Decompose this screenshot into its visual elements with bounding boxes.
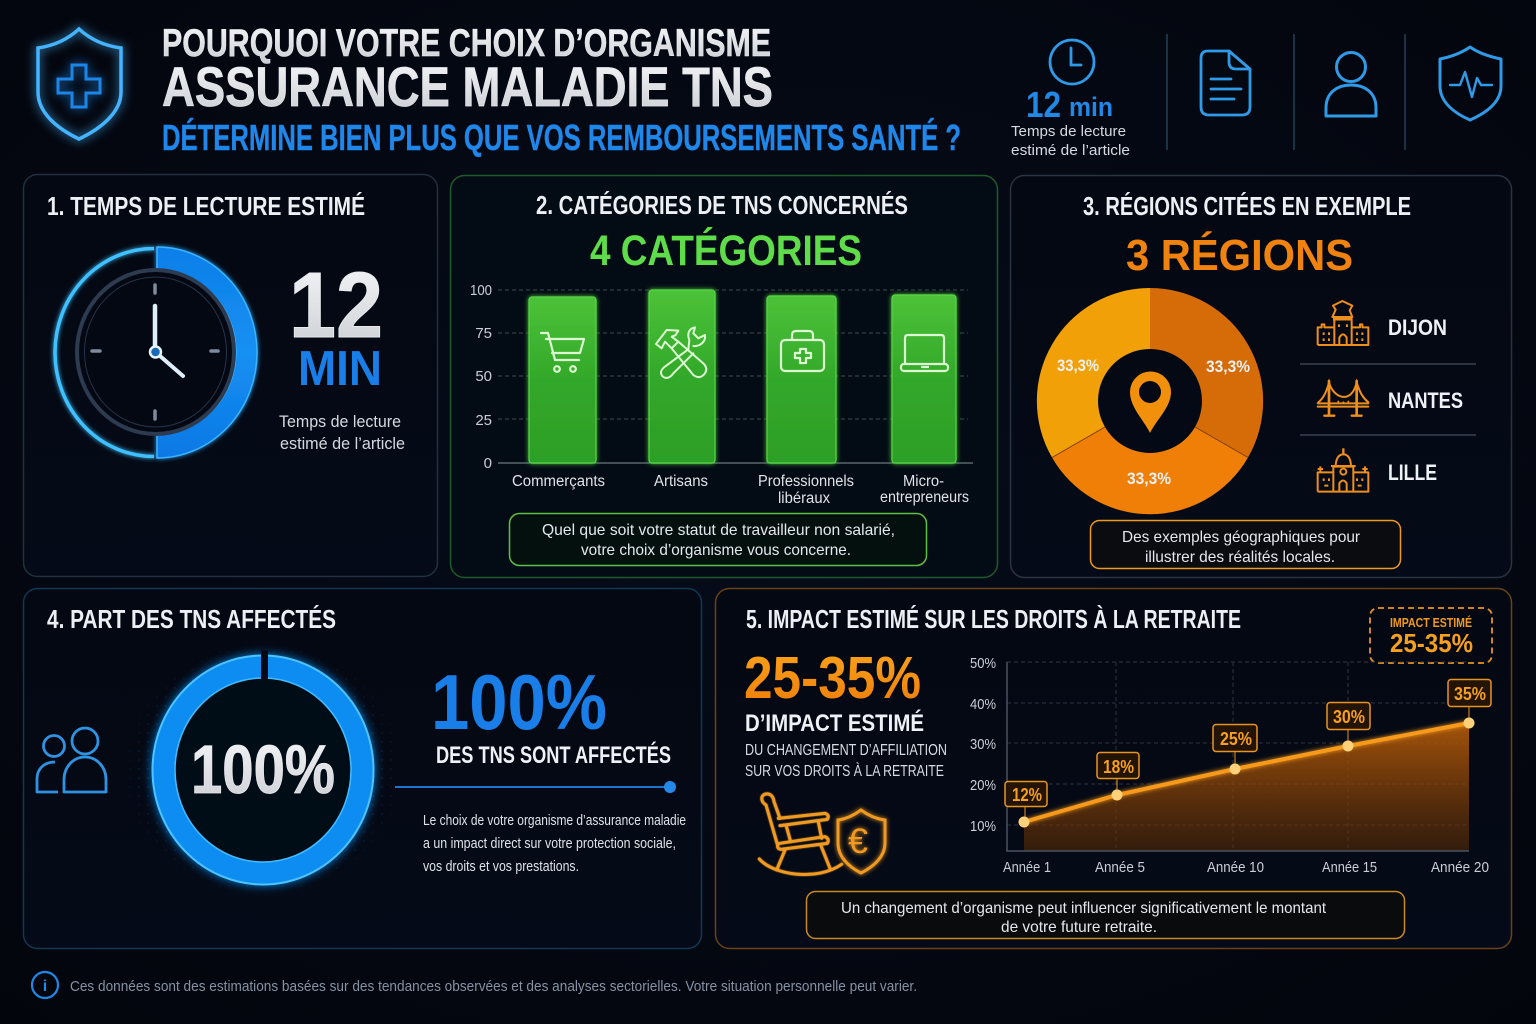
data point 30%: 30% [1333,707,1365,727]
icon: location pin [1130,371,1171,433]
panel 2: categories [450,176,998,578]
title line 2: ASSURANCE MALADIE TNS [162,55,773,118]
icon: health shield [1440,47,1501,120]
city name: DIJON [1388,315,1447,340]
bar: commerçants [529,297,596,463]
icon: people [37,728,106,792]
heading 4: 4. PART DES TNS AFFECTÉS [47,604,336,634]
reading time unit: min [1069,92,1113,122]
x-axis labels: Micro- [903,473,944,490]
x-axis labels: libéraux [778,490,830,507]
y-axis labels: 40% [970,696,996,713]
callout green: Quel que soit votre statut de travailleur non salarié, [542,522,895,539]
impact description: SUR VOS DROITS À LA RETRAITE [745,761,944,780]
callout retirement: de votre future retraite. [1001,919,1157,936]
divider with dot [395,781,676,793]
x-axis labels: Année 5 [1095,859,1145,876]
panel 1: reading time [24,174,438,576]
y-axis labels: 20% [970,777,996,794]
city: Nantes [1318,381,1463,416]
big number 12: 12 [289,253,383,357]
bar chart: 75 [475,325,492,342]
slice labels [1057,356,1250,488]
bar chart: 25 [475,412,492,429]
bar chart: 0 [484,455,492,472]
data point 25%: 25% [1220,729,1252,749]
data point 18% [1097,752,1139,800]
heading 1: 1. TEMPS DE LECTURE ESTIMÉ [47,191,365,221]
icon: small clock [1050,40,1094,84]
title line 3: DÉTERMINE BIEN PLUS QUE VOS REMBOURSEMENTS SANTÉ ? [162,117,961,158]
x-axis labels [512,473,969,507]
bar: artisans [649,290,715,463]
callout green [510,514,926,566]
icon: rocking chair [759,794,842,875]
big value: 25-35% [744,645,921,711]
icon: Lille building [1318,448,1368,492]
x-axis labels: entrepreneurs [880,489,969,506]
city: Lille [1318,448,1437,492]
impact description: DU CHANGEMENT D’AFFILIATION [745,742,947,759]
x-axis labels: Commerçants [512,473,605,490]
impact label: D’IMPACT ESTIMÉ [745,709,924,737]
description: vos droits et vos prestations. [423,858,579,875]
callout retirement: Un changement d’organisme peut influencer significativement le montant [841,900,1327,917]
description: Le choix de votre organisme d’assurance maladie [423,812,686,829]
header: icons row [1011,34,1501,159]
data point 35%: 35% [1454,684,1486,704]
bar: micro-entrepreneurs [892,295,956,463]
reading time caption [1011,123,1130,159]
callout orange [1090,520,1400,568]
icon: info [32,972,58,998]
data point 12% [1005,782,1047,828]
panel 5: retirement impact [716,588,1512,948]
callout green: votre choix d’organisme vous concerne. [581,542,851,559]
x-axis labels: Artisans [654,473,708,490]
x-axis labels: Année 20 [1431,859,1489,876]
impact description [745,742,947,780]
description [423,812,686,875]
dashed badge: 25-35% [1390,628,1473,658]
panel 4: share of TNS [24,588,702,948]
icon: medical shield [38,29,121,139]
title line 1: POURQUOI VOTRE CHOIX D’ORGANISME [162,22,771,65]
heading 2: 2. CATÉGORIES DE TNS CONCERNÉS [536,190,908,220]
dashed badge: IMPACT ESTIMÉ [1390,615,1472,630]
big value 100 percent: 100% [431,658,607,746]
caption [279,412,405,453]
footer note [32,972,917,998]
icon: document [1201,51,1250,115]
x-axis labels: Année 15 [1322,859,1377,876]
callout orange: illustrer des réalités locales. [1145,549,1335,566]
x-axis labels: Année 10 [1207,859,1264,876]
header: title block [38,22,961,158]
reading time value: 12 [1026,84,1061,125]
donut chart [1037,288,1263,514]
big label 4 catégories: 4 CATÉGORIES [590,227,862,275]
unit MIN: MIN [298,342,382,396]
icon: info: i [43,978,47,995]
donut 100 percent [129,646,400,895]
city name: NANTES [1388,388,1463,413]
slice labels: 33,3% [1057,356,1099,375]
clock dial [55,247,257,458]
bar: professionnels libéraux [767,296,836,463]
description: a un impact direct sur votre protection sociale, [423,835,676,852]
callout retirement [806,892,1404,938]
bar chart [470,282,973,507]
icon: person [1326,52,1376,116]
disclaimer text: Ces données sont des estimations basées sur des tendances observées et des analyses sectorielles. Votre situation personnelle peut varier. [70,978,917,995]
caption: Temps de lecture [279,412,401,431]
icon: Dijon building [1318,301,1368,345]
x-axis labels [1003,859,1489,876]
slice labels: 33,3% [1206,357,1250,376]
icon: euro shield [838,810,885,873]
icon: Nantes bridge [1318,381,1368,416]
x-axis labels: Année 1 [1003,859,1051,876]
heading 3: 3. RÉGIONS CITÉES EN EXEMPLE [1083,191,1411,221]
data point 35% [1448,680,1491,728]
line chart [970,655,1491,876]
city name: LILLE [1388,460,1437,485]
y-axis labels: 30% [970,736,996,753]
callout orange: Des exemples géographiques pour [1122,529,1361,546]
data point 25% [1213,724,1257,774]
panel 3: regions [1010,176,1512,578]
heading 5: 5. IMPACT ESTIMÉ SUR LES DROITS À LA RETRAITE [746,604,1241,634]
subtitle: DES TNS SONT AFFECTÉS [436,741,671,769]
slice labels: 33,3% [1127,469,1171,488]
data point 30% [1327,702,1370,752]
data point 18%: 18% [1103,757,1134,777]
big label 3 régions: 3 RÉGIONS [1126,230,1353,280]
bar chart: 100 [470,282,492,299]
reading time caption: estimé de l’article [1011,142,1130,159]
icon: euro shield: € [848,822,868,861]
x-axis labels: Professionnels [758,473,854,490]
reading time caption: Temps de lecture [1011,123,1126,140]
donut centre value: 100% [191,731,335,808]
y-axis labels [970,655,996,835]
dashed badge [1370,608,1492,663]
y-axis labels: 10% [970,818,996,835]
caption: estimé de l’article [280,434,405,453]
y-axis labels: 50% [970,655,996,672]
city: Dijon [1318,301,1447,345]
data point 12%: 12% [1012,785,1042,805]
bar chart: 50 [475,368,492,385]
